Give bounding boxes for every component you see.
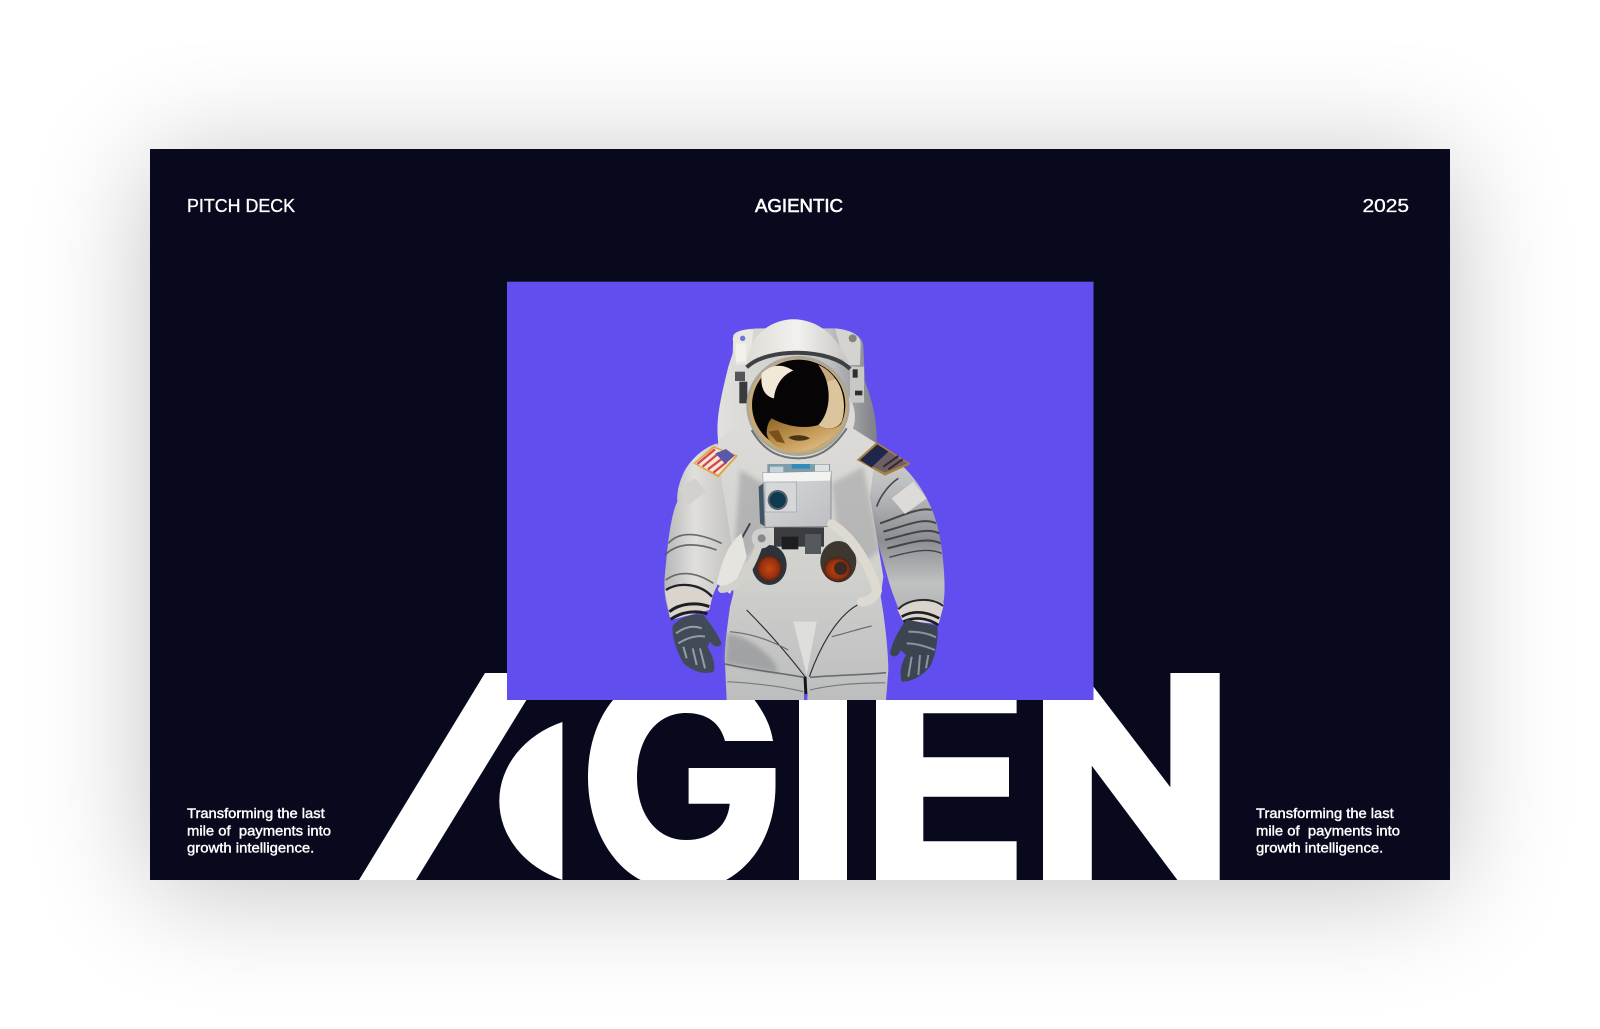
- visor reflection: bottom gold: [767, 418, 842, 452]
- right vent: [820, 541, 856, 582]
- astronaut: left helmet bracket: [733, 330, 753, 403]
- astronaut: helmet dome: [747, 319, 849, 363]
- left cuff: [665, 585, 712, 620]
- astronaut: helmet collar: [742, 372, 855, 462]
- centre panel: [793, 622, 817, 675]
- panel: dark slide with soft shadow: [150, 149, 1450, 880]
- caption: bottom left: mile of payments into: [187, 822, 331, 838]
- left hose: [722, 537, 762, 589]
- letter I: [799, 700, 847, 880]
- astronaut: right arm folds: [877, 478, 942, 557]
- letter N: [1043, 673, 1220, 880]
- astronaut illustration: [664, 319, 945, 700]
- giant wordmark AGIEN cropped at slide bottom: [359, 668, 1220, 884]
- astronaut: left arm: [664, 443, 732, 618]
- astronaut: neck ring: [752, 428, 847, 458]
- letter A: curved inner form: [499, 722, 562, 880]
- astronaut: right arm: [863, 443, 945, 618]
- letter E: [876, 700, 1017, 880]
- left vent: [752, 545, 787, 585]
- astronaut: shoulder pocket left: [678, 478, 707, 505]
- astronaut: lower panel details: [665, 524, 944, 700]
- letter A: diagonal stroke: [359, 673, 543, 880]
- caption: bottom left: [187, 805, 331, 856]
- astronaut: torso and legs: [717, 427, 888, 700]
- astronaut: chest connectors: [774, 527, 824, 554]
- header label: year: 2025: [1362, 196, 1409, 216]
- astronaut: thigh shading: [725, 633, 778, 673]
- astronaut: visor: [746, 356, 850, 456]
- left glove: [673, 615, 722, 673]
- visor highlight: upper left: [761, 366, 793, 398]
- visor highlight: right crescent: [818, 378, 844, 429]
- purple image block: [507, 282, 1094, 700]
- visor highlight: top right: [818, 365, 835, 382]
- chest box lens: [768, 490, 788, 510]
- astronaut: helmet rim: [747, 353, 850, 369]
- caption: bottom left: growth intelligence.: [187, 840, 314, 856]
- crotch gap: [804, 694, 807, 700]
- header label: brand name: AGIENTIC: [755, 196, 843, 216]
- astronaut: right helmet bracket: [835, 328, 864, 403]
- astronaut: left flag: [693, 446, 738, 477]
- astronaut: shoulder pocket right: [892, 482, 927, 514]
- right glove: [890, 619, 938, 682]
- astronaut: right flag: [857, 442, 911, 476]
- right cuff: [897, 599, 944, 625]
- right hose: [832, 524, 877, 602]
- left side bag: [717, 533, 747, 594]
- slide artwork: [187, 198, 1408, 880]
- caption: bottom right: growth intelligence.: [1256, 840, 1383, 856]
- caption: bottom right: Transforming the last: [1256, 805, 1394, 821]
- astronaut: left arm folds: [665, 523, 750, 583]
- caption: bottom right: mile of payments into: [1256, 822, 1400, 838]
- astronaut: chest control box: [759, 471, 831, 527]
- body seams: [725, 605, 886, 697]
- header label: pitch deck: PITCH DECK: [187, 196, 295, 216]
- astronaut: chest electronics strip: [767, 464, 830, 475]
- caption: bottom left: Transforming the last: [187, 805, 325, 821]
- astronaut: chest side shading: [735, 470, 765, 563]
- astronaut: backpack behind helmet: [717, 328, 877, 443]
- letter G: [588, 700, 776, 880]
- caption: bottom right: [1256, 805, 1400, 856]
